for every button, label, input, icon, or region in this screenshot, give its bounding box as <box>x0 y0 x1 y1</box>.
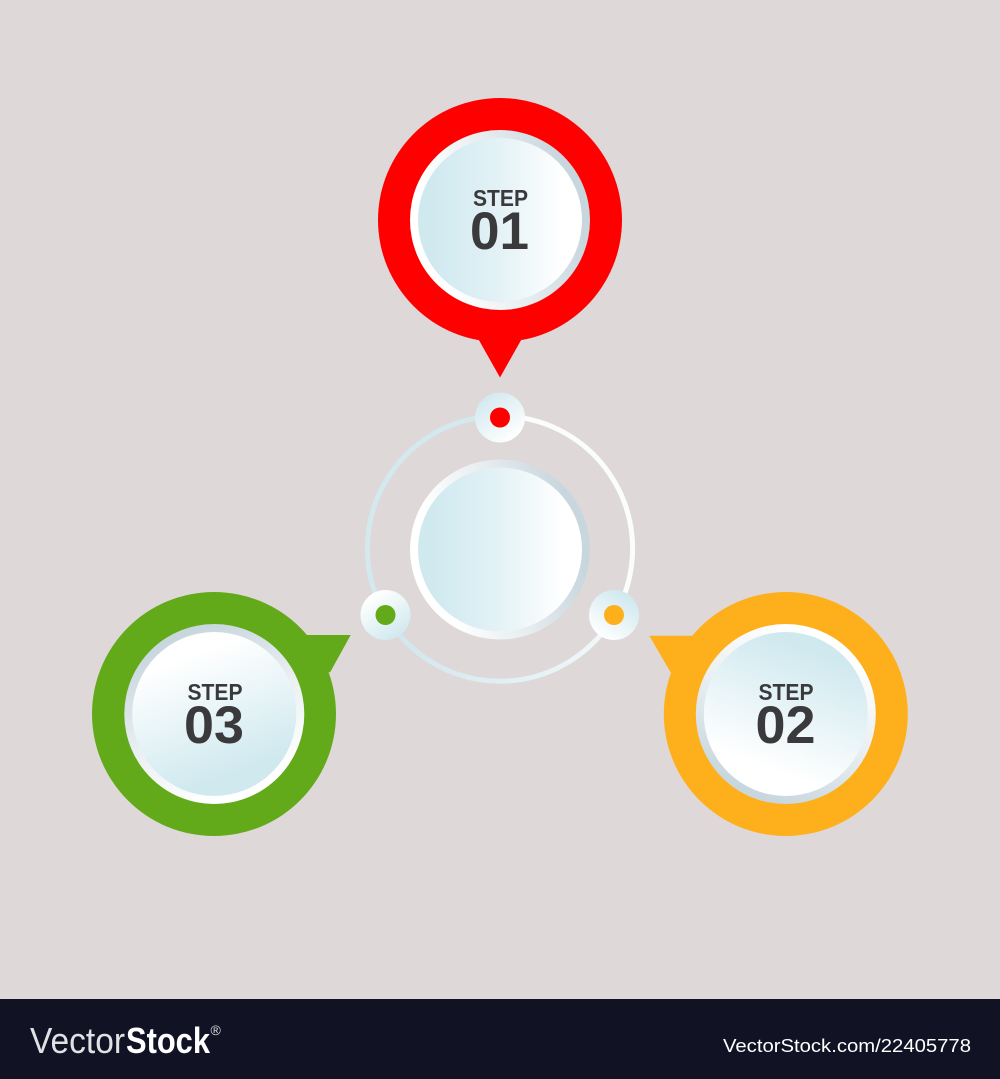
footer bar <box>0 999 1000 1079</box>
central orbit ring <box>367 416 633 681</box>
step 03 number: 03 <box>184 696 244 755</box>
footer logo bold part: Stock <box>126 1020 211 1061</box>
step 02 number: 02 <box>756 696 816 755</box>
step 03 label: STEP <box>188 679 242 705</box>
registered mark: ® <box>210 1022 222 1038</box>
step 01 label: STEP <box>473 185 528 211</box>
step 02 label: STEP <box>758 679 814 705</box>
step 02 face <box>704 632 868 796</box>
footer logo light part: Vector <box>30 1020 125 1061</box>
step 02 bevel <box>696 624 876 804</box>
step 01 number: 01 <box>470 202 529 261</box>
orange pin shape <box>649 592 908 836</box>
step 01 pin <box>378 98 622 378</box>
green pin shape <box>92 592 351 836</box>
central blank circle <box>410 460 590 640</box>
node: orange <box>589 590 639 640</box>
footer image id: VectorStock.com/22405778 <box>723 1035 971 1056</box>
step 03 pin <box>92 592 351 836</box>
step 03 bevel <box>124 624 304 804</box>
red pin shape <box>378 98 622 378</box>
step 01 face <box>418 138 582 302</box>
node: red <box>475 392 525 442</box>
step 02 pin <box>649 592 908 836</box>
node: green <box>360 590 410 640</box>
step 01 bevel <box>410 130 590 310</box>
step 03 face <box>132 632 296 796</box>
